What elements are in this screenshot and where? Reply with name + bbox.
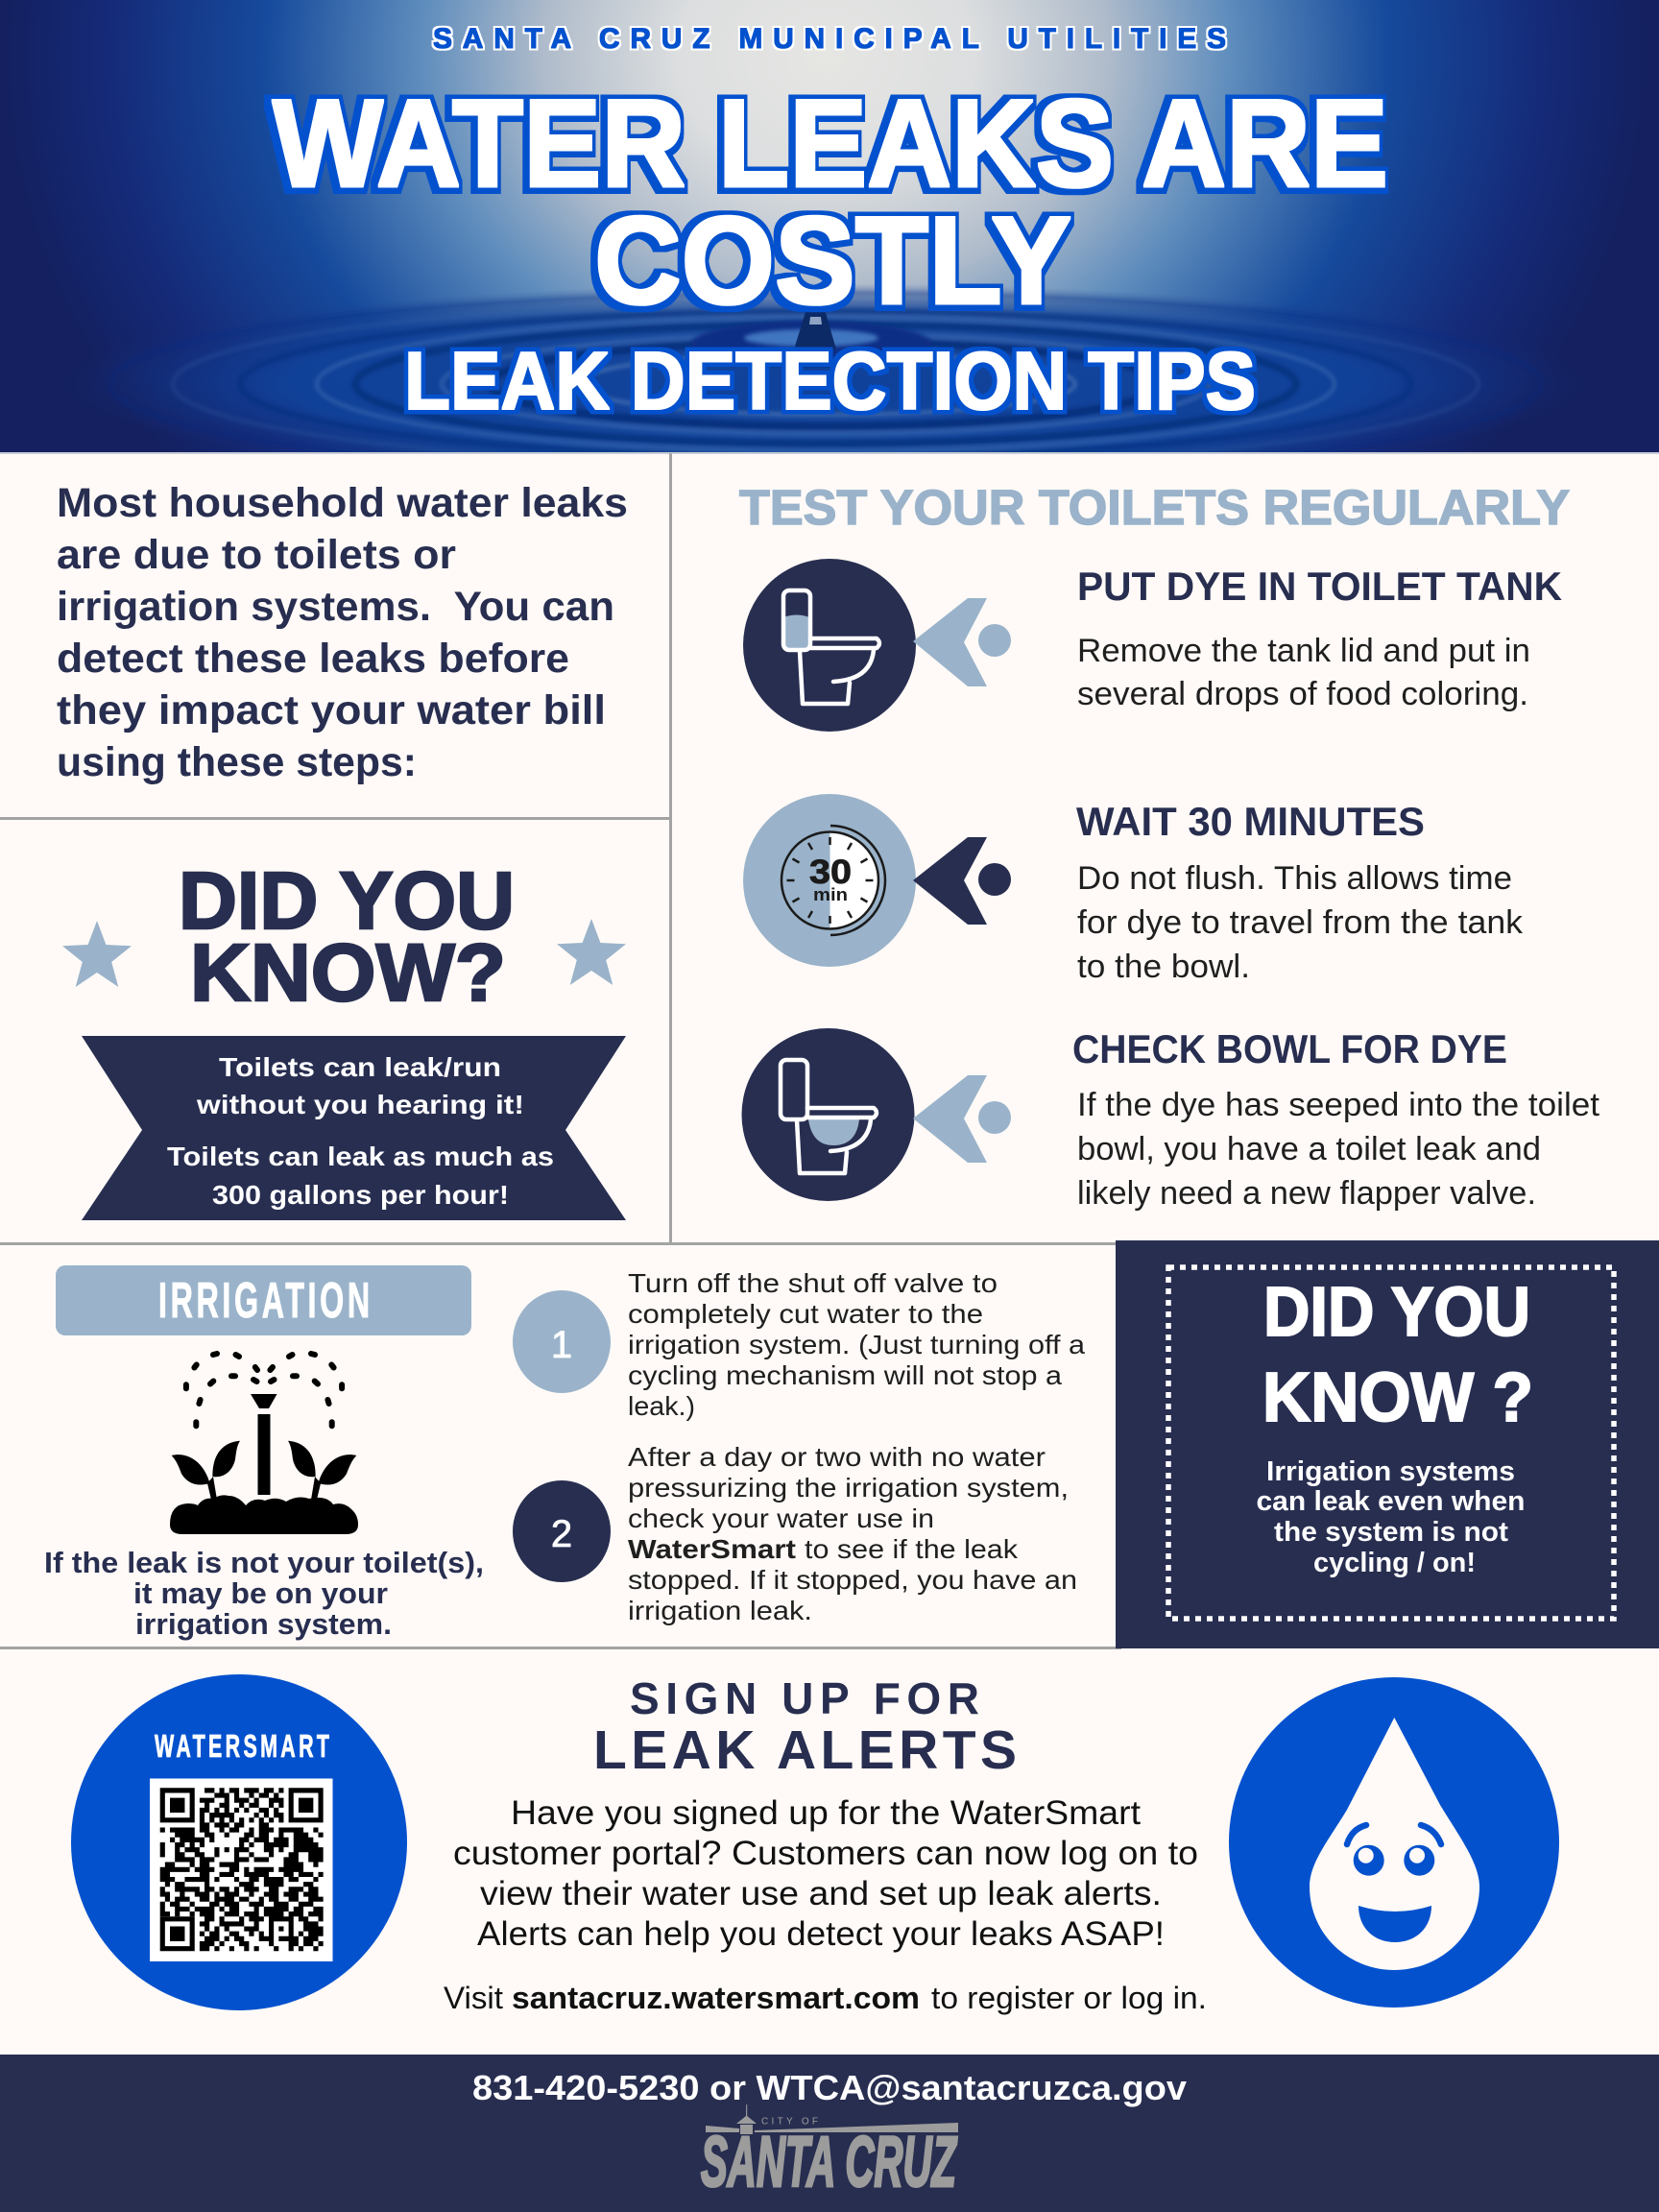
website line: Visit [444, 1981, 503, 2015]
ribbon text: 300 gallons per hour! [212, 1180, 509, 1210]
callout text: Irrigation systems [1266, 1456, 1515, 1487]
step 2 text: to the bowl. [1077, 949, 1250, 985]
ribbon text: without you hearing it! [196, 1090, 524, 1119]
organisation name: SANTA CRUZ MUNICIPAL UTILITIES [433, 23, 1226, 55]
icon: water drop stem [794, 300, 836, 349]
irrigation step 2 text: check your water use in [628, 1503, 934, 1533]
callout text: can leak even when [1256, 1486, 1525, 1517]
irrigation step 1 text: cycling mechanism will not stop a [628, 1360, 1062, 1390]
QR code badge: WATERSMART [155, 1728, 329, 1764]
panel: irrigation [44, 1265, 1085, 1641]
header banner [0, 0, 1659, 475]
step 3 text: likely need a new flapper valve. [1077, 1175, 1536, 1212]
callout text [1256, 1456, 1525, 1578]
step 2 text [1077, 860, 1524, 985]
panel: did you know toilets [62, 855, 626, 1220]
irrigation step 2 text: stopped. If it stopped, you have an [628, 1565, 1077, 1595]
heading: did you know: DID YOU [179, 855, 515, 946]
main title [273, 73, 1388, 330]
header water background [0, 0, 1659, 475]
heading: test your toilets regularly: TEST YOUR TOILETS REGULARLY [739, 480, 1570, 535]
ribbon banner [82, 1036, 626, 1220]
sign up text: view their water use and set up leak alerts. [480, 1875, 1162, 1912]
callout text: the system is not [1274, 1517, 1508, 1548]
heading: sign up for leak alerts: LEAK ALERTS [593, 1719, 1017, 1781]
step 3 text: bowl, you have a toilet leak and [1077, 1131, 1541, 1167]
irrigation step 2 text: WaterSmart [628, 1534, 796, 1564]
step 3 icon: toilet bowl with dye [741, 1028, 914, 1201]
icon: sprinkler and plants [170, 1354, 358, 1534]
arrow 3 [913, 1075, 1011, 1163]
heading: did you know [179, 855, 515, 1018]
panel: introduction text: detect these leaks before [57, 636, 569, 682]
panel: introduction text [57, 480, 628, 785]
step 2 heading: WAIT 30 MINUTES [1076, 799, 1425, 844]
QR code badge [71, 1674, 407, 2010]
irrigation text [44, 1546, 484, 1641]
irrigation step 2 text: irrigation leak. [628, 1596, 812, 1625]
irrigation step 1 text: Turn off the shut off valve to [628, 1268, 998, 1298]
irrigation step 1 text: irrigation system. (Just turning off a [628, 1330, 1085, 1359]
step 3 heading: CHECK BOWL FOR DYE [1072, 1026, 1507, 1071]
logo: City of Santa Cruz: CITY OF [761, 2116, 818, 2128]
logo: City of Santa Cruz [701, 2104, 958, 2201]
section dividers [0, 452, 1659, 1649]
heading: did you know [1262, 1274, 1533, 1436]
ribbon text: Toilets can leak/run [219, 1052, 501, 1082]
panel: introduction text: using these steps: [57, 739, 417, 785]
main title: WATER LEAKS ARE [273, 73, 1388, 213]
website line: to register or log in. [931, 1981, 1207, 2015]
sign up text: Alerts can help you detect your leaks ASAP! [477, 1915, 1165, 1953]
icon: left star [62, 921, 132, 987]
step 2 text: Do not flush. This allows time [1077, 860, 1512, 897]
step 1 icon: toilet tank with dye [743, 559, 916, 732]
panel: sign up for leak alerts [71, 1673, 1559, 2015]
step 2 icon: 30 minute timer: min [813, 885, 848, 904]
panel: introduction text: irrigation systems. You can [57, 584, 614, 630]
irrigation text: irrigation system. [135, 1607, 392, 1641]
arrow 1 [913, 598, 1011, 686]
irrigation step 1 text [628, 1268, 1085, 1421]
irrigation text: If the leak is not your toilet(s), [44, 1546, 484, 1579]
step 2 text: for dye to travel from the tank [1077, 904, 1524, 941]
step badge 1: 1 [551, 1324, 572, 1366]
callout text: cycling / on! [1313, 1548, 1476, 1578]
footer [0, 2055, 1659, 2212]
main title: COSTLY [594, 190, 1071, 330]
irrigation heading box: IRRIGATION [158, 1273, 370, 1329]
step 2 icon: 30 minute timer [743, 794, 916, 967]
irrigation step 2 text [628, 1442, 1077, 1625]
panel: introduction text: Most household water leaks [57, 480, 628, 526]
step 1 text: several drops of food coloring. [1077, 676, 1528, 712]
step 2 icon: 30 minute timer: 30 [809, 854, 852, 891]
irrigation step 1 text: leak.) [628, 1391, 695, 1421]
step 3 text: If the dye has seeped into the toilet [1077, 1087, 1600, 1123]
heading: did you know: KNOW ? [1262, 1359, 1533, 1436]
step badge 2 [513, 1480, 611, 1582]
sign up text: Have you signed up for the WaterSmart [511, 1794, 1141, 1832]
step badge 2: 2 [551, 1513, 572, 1555]
heading: did you know: KNOW? [190, 927, 506, 1018]
contact line: 831-420-5230 or WTCA@santacruzca.gov [472, 2068, 1187, 2107]
sign up text: customer portal? Customers can now log on to [453, 1835, 1198, 1872]
panel: introduction text: they impact your water bill [57, 687, 606, 733]
sign up text [453, 1794, 1198, 1953]
irrigation step 1 text: completely cut water to the [628, 1299, 983, 1329]
icon: smiling water drop [1229, 1677, 1559, 2008]
irrigation step 2 text: pressurizing the irrigation system, [628, 1473, 1069, 1503]
panel: introduction text: are due to toilets or [57, 532, 456, 578]
website line: santacruz.watersmart.com [512, 1981, 920, 2015]
arrow 2 [913, 837, 1011, 925]
irrigation step 2 text: After a day or two with no water [628, 1442, 1046, 1472]
step 3 text [1077, 1087, 1600, 1212]
icon: right star [557, 919, 626, 985]
ribbon text: Toilets can leak as much as [167, 1142, 554, 1171]
heading: sign up for leak alerts [593, 1673, 1017, 1781]
panel: did you know irrigation [1116, 1240, 1659, 1648]
subtitle: LEAK DETECTION TIPS [404, 336, 1256, 427]
step 1 heading: PUT DYE IN TOILET TANK [1077, 564, 1562, 609]
irrigation step 2 text: to see if the leak [805, 1534, 1019, 1564]
dotted frame [1168, 1267, 1614, 1619]
website line [444, 1981, 1207, 2015]
step 1 text [1077, 633, 1530, 712]
step badge 1 [513, 1290, 611, 1393]
panel: test your toilets [739, 480, 1600, 1212]
step 1 text: Remove the tank lid and put in [1077, 633, 1530, 669]
logo: City of Santa Cruz: SANTA CRUZ [701, 2122, 958, 2201]
ribbon text [167, 1052, 554, 1210]
heading: sign up for leak alerts: SIGN UP FOR [630, 1673, 979, 1723]
irrigation text: it may be on your [133, 1576, 388, 1610]
irrigation heading box [56, 1265, 471, 1335]
heading: did you know: DID YOU [1263, 1274, 1530, 1351]
